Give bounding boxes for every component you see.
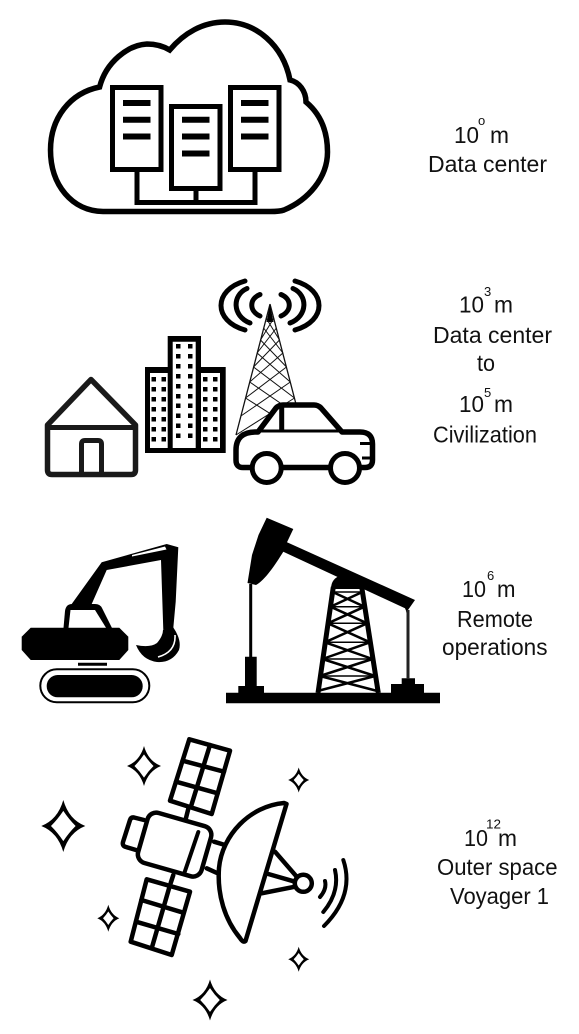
label: outer space scale: Voyager 1 [450,883,549,909]
label: data center scale [428,113,547,177]
label: data center to civilization scale: 10 [459,391,484,417]
icon: house [48,380,136,474]
label: data center to civilization scale: 5 [484,385,491,400]
icon: oil pumpjack [226,518,440,703]
label: data center to civilization scale: to [477,350,495,376]
label: outer space scale: m [498,825,517,851]
label: outer space scale [437,816,558,909]
icon: excavator [22,544,180,702]
icon: car [236,405,372,482]
icon: cloud with data center servers [50,22,328,212]
icon: satellite [123,739,347,955]
label: data center scale: Data center [428,151,547,177]
label: remote operations scale: operations [442,634,548,660]
label: data center to civilization scale: Data center [433,322,552,348]
label: outer space scale: 10 [464,825,488,851]
label: data center to civilization scale: m [494,292,513,318]
label: remote operations scale: 6 [487,568,494,583]
label: data center to civilization scale: 10 [459,292,484,318]
label: remote operations scale [442,568,548,660]
label: data center to civilization scale: 3 [484,284,491,299]
label: data center scale: o [478,113,485,128]
label: remote operations scale: 10 [462,576,486,602]
label: outer space scale: 12 [486,816,501,832]
label: outer space scale: Outer space [437,854,558,880]
label: data center to civilization scale [433,284,552,448]
icon: stars [41,746,309,1020]
label: data center to civilization scale: m [494,391,513,417]
label: remote operations scale: Remote [457,606,533,632]
icon: city buildings [145,336,226,453]
label: data center to civilization scale: Civilization [433,422,537,448]
label: data center scale: m [490,122,509,148]
icon: radio tower with signal waves [221,281,319,435]
label: remote operations scale: m [497,576,516,602]
label: data center scale: 10 [454,122,479,148]
